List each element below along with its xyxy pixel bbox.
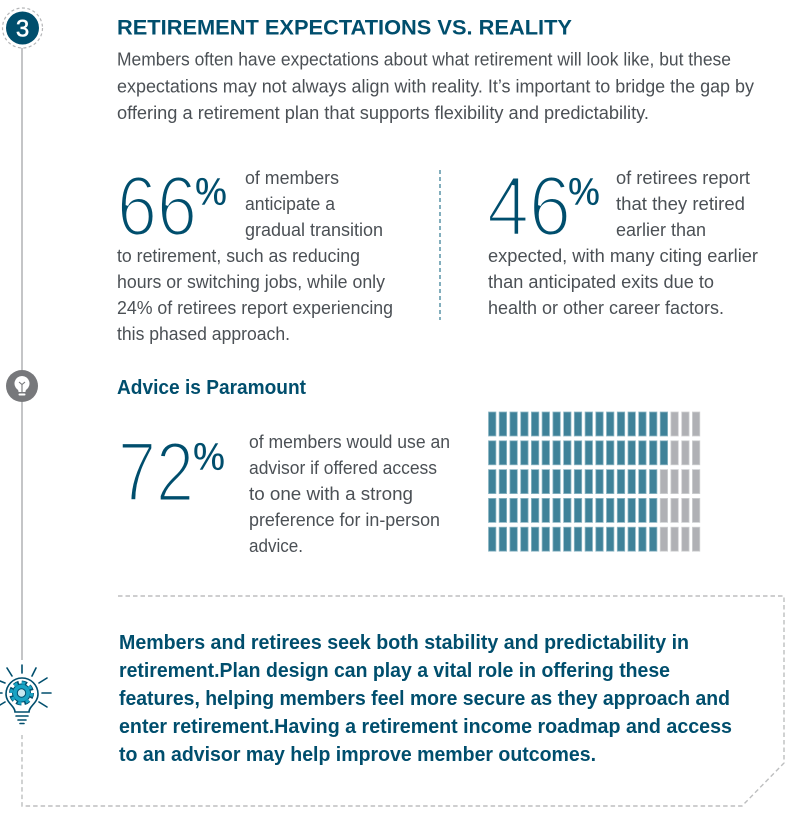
stat: 46 percent: that they retired <box>616 194 745 214</box>
stat: 72 percent: advisor if offered access <box>249 458 437 478</box>
callout panel: to an advisor may help improve member outcomes. <box>119 744 596 766</box>
callout panel <box>22 596 784 806</box>
stat: 66 percent: hours or switching jobs, while only <box>117 272 385 292</box>
stat: 46 percent <box>487 159 758 318</box>
stat: 72 percent: % <box>193 435 225 479</box>
step number badge: 3 <box>16 16 29 42</box>
divider <box>439 170 441 320</box>
stat: 66 percent: 66 <box>117 159 197 253</box>
stat: 66 percent <box>117 159 393 344</box>
title: RETIREMENT EXPECTATIONS VS. REALITY <box>117 16 572 40</box>
stat: 72 percent: preference for in-person <box>249 510 440 530</box>
stat: 46 percent: % <box>568 170 600 214</box>
timeline line <box>21 46 23 660</box>
stat: 46 percent: 46 <box>487 159 571 253</box>
intro paragraph: Members often have expectations about what retirement will look like, but these <box>117 50 731 70</box>
stat: 66 percent: to retirement, such as reducing <box>117 246 360 266</box>
stat: 66 percent: of members <box>245 168 339 188</box>
intro paragraph <box>117 50 754 123</box>
stat: 46 percent: health or other career factors. <box>488 298 724 318</box>
stat: 46 percent: expected, with many citing earlier <box>488 246 758 266</box>
stat: 46 percent: than anticipated exits due to <box>488 272 714 292</box>
step number badge <box>2 8 42 48</box>
heading: advice: Advice is Paramount <box>117 377 306 399</box>
icon: light bulb with gear <box>0 665 51 724</box>
waffle chart <box>488 412 700 551</box>
callout panel: enter retirement.Having a retirement income roadmap and access <box>119 716 732 738</box>
stat: 66 percent: gradual transition <box>245 220 383 240</box>
stat: 66 percent: this phased approach. <box>117 324 290 344</box>
stat: 46 percent: of retirees report <box>616 168 750 188</box>
stat: 66 percent: anticipate a <box>245 194 336 214</box>
stat: 72 percent: to one with a strong <box>249 484 413 504</box>
stat: 72 percent: of members would use an <box>249 432 450 452</box>
callout panel: features, helping members feel more secure as they approach and <box>119 688 730 710</box>
intro paragraph: offering a retirement plan that supports flexibility and predictability. <box>117 103 649 123</box>
callout panel: retirement.Plan design can play a vital role in offering these <box>119 660 670 682</box>
stat: 72 percent: 72 <box>118 425 194 519</box>
stat: 72 percent <box>118 425 450 556</box>
stat: 72 percent: advice. <box>249 536 303 556</box>
callout panel: Members and retirees seek both stability and predictability in <box>119 632 689 654</box>
intro paragraph: expectations may not always align with reality. It’s important to bridge the gap by <box>117 76 754 96</box>
stat: 66 percent: 24% of retirees report experiencing <box>117 298 393 318</box>
stat: 66 percent: % <box>195 170 227 214</box>
stat: 46 percent: earlier than <box>616 220 706 240</box>
icon: grey light bulb <box>6 370 38 402</box>
